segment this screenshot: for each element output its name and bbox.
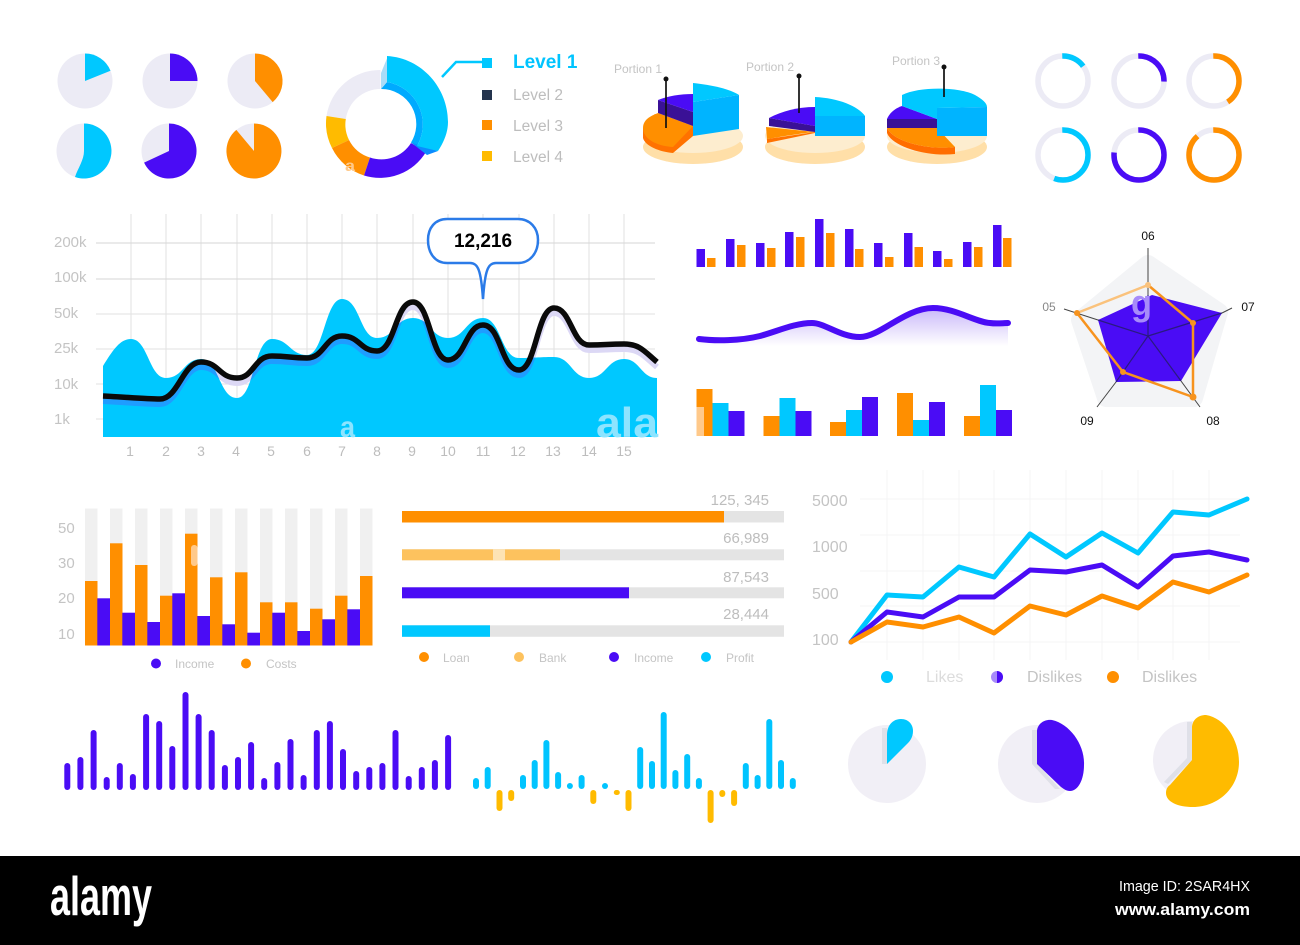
legend: Costs [266, 657, 297, 671]
y axis labels: 25k [54, 340, 79, 357]
x axis labels: 8 [373, 443, 381, 459]
y axis labels: 100k [54, 269, 87, 286]
3D pie: portion 2: Portion 2 [746, 60, 794, 74]
horizontal progress bars [402, 492, 784, 665]
x axis labels: 15 [616, 443, 632, 459]
legend: Income [175, 657, 215, 671]
y axis labels: 50 [58, 520, 75, 537]
radar chart: 09 [1080, 414, 1094, 428]
y axis labels: 100 [812, 632, 839, 649]
donut legend: Level 2 [513, 87, 563, 104]
pie: purple two thirds [142, 123, 197, 178]
donut legend: Level 3 [513, 118, 563, 135]
donut legend: Level 1 [513, 52, 578, 73]
value callout: 12,216 [454, 231, 512, 252]
3D pie: portion 1: Portion 1 [614, 62, 662, 76]
y axis labels: 500 [812, 586, 839, 603]
paired bar chart top [696, 219, 1012, 267]
value callout [428, 219, 538, 299]
radar chart: 05 [1042, 300, 1056, 314]
ring: orange most [1189, 130, 1239, 180]
donut legend: Level 4 [513, 149, 563, 166]
3D pie: portion 1 [614, 62, 743, 164]
multi line chart [812, 470, 1247, 686]
radar chart: 07 [1241, 300, 1255, 314]
grouped bar chart [696, 385, 1012, 436]
y axis labels: 10k [54, 376, 79, 393]
x axis labels: 4 [232, 443, 240, 459]
y axis labels: 30 [58, 555, 75, 572]
pie: cyan half [56, 124, 112, 178]
x axis labels: 13 [545, 443, 561, 459]
watermark on area: a [340, 411, 355, 444]
y axis labels [58, 520, 75, 643]
legend [151, 657, 297, 671]
x axis labels: 1 [126, 443, 134, 459]
ring: cyan half [1038, 130, 1088, 180]
x axis labels: 10 [440, 443, 456, 459]
legend: Dislikes [1142, 669, 1197, 686]
radar chart: g [1131, 282, 1152, 323]
x axis labels: 6 [303, 443, 311, 459]
footer bar: Image ID: 2SAR4HX [1119, 878, 1250, 895]
diverging bar sequence [473, 712, 796, 823]
exploded donut chart: a [345, 158, 355, 175]
x axis labels: 7 [338, 443, 346, 459]
3D pie: portion 3 [887, 54, 987, 164]
footer bar: alamy [50, 865, 152, 927]
main area and line chart [54, 214, 659, 459]
radar chart [1042, 229, 1255, 428]
cyan area series [103, 299, 657, 437]
bar legend: Profit [726, 651, 755, 665]
pie: cyan small slice [58, 54, 112, 108]
y axis labels: 5000 [812, 493, 848, 510]
black line series [103, 302, 657, 399]
y axis labels: 10 [58, 626, 75, 643]
pie: purple quarter [142, 54, 198, 108]
x axis labels: 5 [267, 443, 275, 459]
purple rounded bar sequence [64, 692, 451, 790]
rounded slice pie: cyan [848, 719, 926, 803]
y axis labels [54, 234, 87, 428]
watermark on area: ala [596, 399, 659, 446]
legend [881, 669, 1197, 686]
donut legend [442, 52, 578, 166]
watermark on area [340, 399, 659, 446]
ring: purple most [1114, 130, 1164, 180]
y axis labels: 50k [54, 305, 79, 322]
bar legend: Loan [443, 651, 470, 665]
purple series [851, 552, 1247, 642]
purple wave line [698, 308, 1008, 346]
x axis labels [126, 443, 632, 459]
x axis labels: 9 [408, 443, 416, 459]
ring: orange [1189, 56, 1239, 106]
3D pie: portion 2 [746, 60, 865, 164]
bar legend: Income [634, 651, 674, 665]
radar chart: 08 [1206, 414, 1220, 428]
x axis labels: 2 [162, 443, 170, 459]
pie: orange most [226, 124, 282, 178]
x axis labels: 3 [197, 443, 205, 459]
rounded slice pie: yellow [1153, 715, 1239, 807]
ring: cyan short [1038, 56, 1088, 106]
x axis labels: 12 [510, 443, 526, 459]
progress ring charts [1038, 56, 1239, 180]
income and costs bar chart [58, 508, 372, 671]
pie: orange slice [228, 53, 283, 108]
footer bar: www.alamy.com [1114, 900, 1250, 919]
y axis labels: 20 [58, 590, 75, 607]
bar values: 28,444 [723, 606, 769, 623]
small pie charts grid [56, 53, 283, 178]
legend: Dislikes [1027, 669, 1082, 686]
rounded slice pie: purple [998, 720, 1084, 803]
ring: purple quarter [1114, 56, 1164, 106]
x axis labels: 11 [476, 443, 490, 459]
legend: Likes [926, 669, 963, 686]
y axis labels: 1k [54, 411, 70, 428]
footer bar [0, 856, 1300, 945]
y axis labels [812, 493, 848, 649]
bar values: 87,543 [723, 569, 769, 586]
bar legend: Bank [539, 651, 567, 665]
orange series [851, 575, 1247, 642]
bar legend [419, 651, 755, 665]
radar chart: 06 [1141, 229, 1155, 243]
bar values [711, 492, 769, 623]
y axis labels: 1000 [812, 539, 848, 556]
cyan series [851, 499, 1247, 642]
3D pie: portion 3: Portion 3 [892, 54, 940, 68]
x axis labels: 14 [581, 443, 597, 459]
y axis labels: 200k [54, 234, 87, 251]
bar values: 125, 345 [711, 492, 769, 509]
exploded donut chart [326, 56, 448, 178]
bar values: 66,989 [723, 530, 769, 547]
